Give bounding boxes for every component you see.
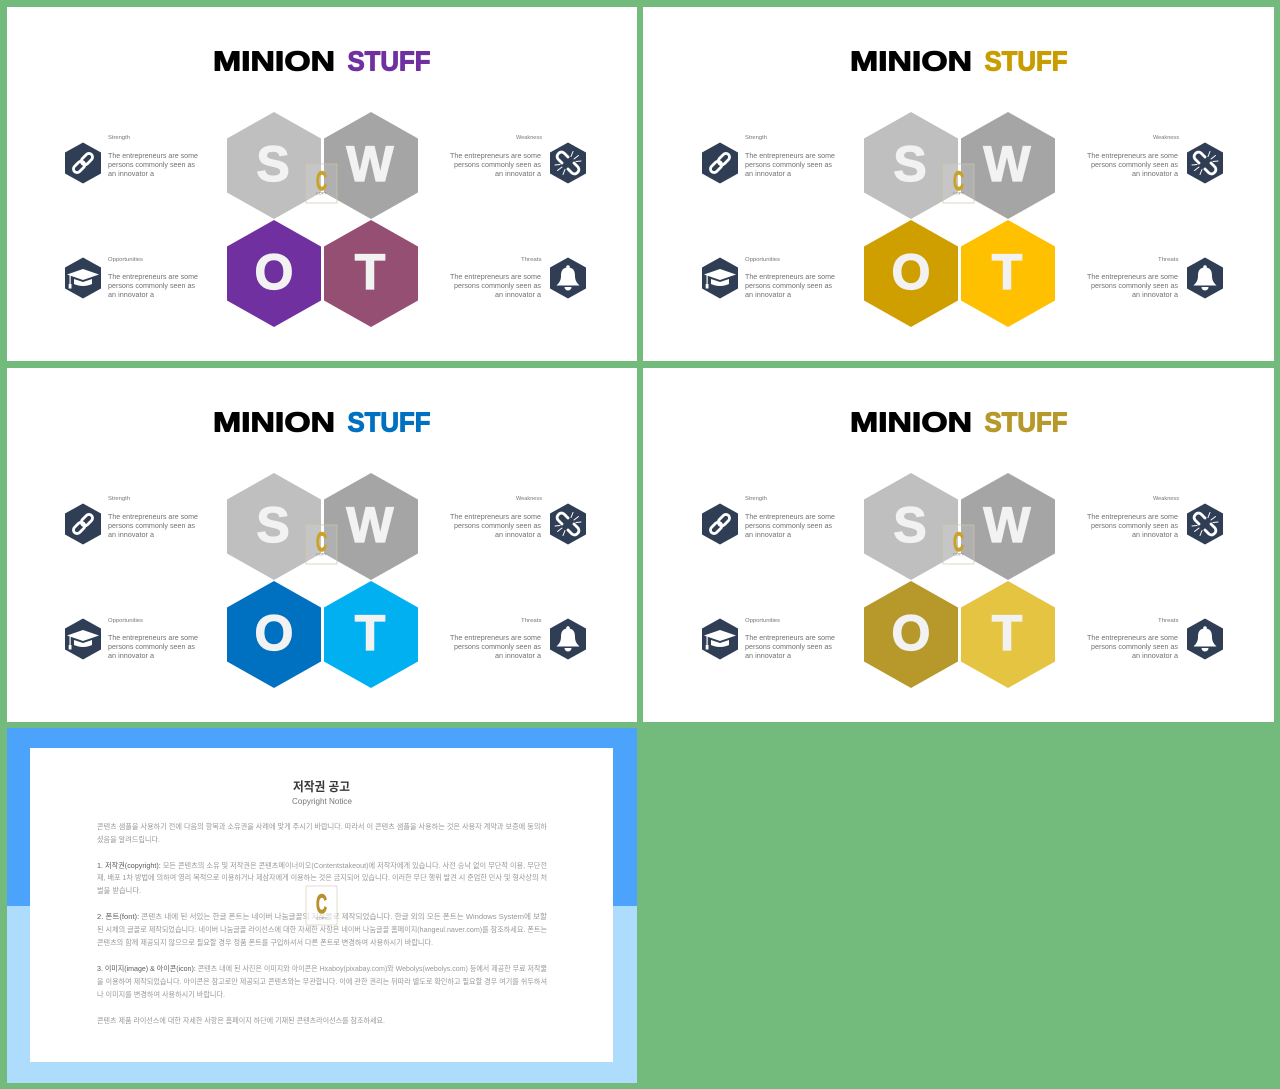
watermark: C (316, 889, 327, 919)
panel: copyright notice (7, 728, 637, 1083)
watermark: COPY (316, 916, 327, 920)
hexagon S: S (893, 497, 927, 553)
panel: gold SWOT slide (643, 7, 1274, 361)
hexagon S: S (893, 136, 927, 192)
text: weakness (1087, 496, 1179, 539)
icon: link (702, 504, 738, 544)
icon: graduation cap (65, 258, 101, 298)
text: weakness: Weakness (1153, 496, 1179, 502)
hexagon S (864, 473, 958, 580)
text: threats: an innovator a (495, 290, 542, 299)
hexagon W: W (346, 136, 394, 192)
hexagon O: O (255, 605, 293, 661)
text: opportunities (108, 257, 198, 299)
hexagon T: T (992, 244, 1022, 300)
watermark: COPY (316, 190, 327, 196)
hexagon T (324, 581, 418, 688)
icon: graduation cap (65, 618, 101, 660)
text: weakness: The entrepreneurs are some (1087, 512, 1178, 521)
text: opportunities: Opportunities (108, 257, 143, 263)
text: threats: persons commonly seen as (454, 281, 541, 290)
hexagon O (227, 581, 321, 688)
text: threats: The entrepreneurs are some (1087, 272, 1178, 281)
text: strength: persons commonly seen as (745, 160, 832, 169)
text: section 3 image and icon: 3. 이미지(image) & 아이콘(icon): 콘텐츠 내에 된 사진은 이미지와 아이콘은 Hxaboy(pixabay.com)와 Webolys(webolys.com) 등에서 제공한 무료 저작물 (97, 964, 547, 973)
text: weakness: an innovator a (495, 530, 542, 539)
text: closing: 콘텐츠 제품 라이선스에 대한 자세한 사항은 홈페이지 하단에 기재된 콘텐츠라이선스를 참조하세요. (97, 1016, 385, 1025)
text: strength: persons commonly seen as (108, 160, 195, 169)
hexagon W (961, 112, 1055, 219)
text: weakness: persons commonly seen as (454, 160, 541, 169)
title: MINION (213, 46, 335, 76)
icon: graduation cap (702, 618, 738, 660)
text: opportunities: Opportunities (745, 257, 780, 263)
text: threats: an innovator a (495, 651, 542, 660)
text: threats: The entrepreneurs are some (450, 633, 541, 642)
text: threats: Threats (521, 257, 542, 263)
hexagon O: O (255, 244, 293, 300)
text: strength: persons commonly seen as (108, 521, 195, 530)
text: weakness: an innovator a (1132, 530, 1179, 539)
hexagon S: S (256, 136, 290, 192)
text: weakness: persons commonly seen as (454, 521, 541, 530)
title (213, 406, 430, 438)
text: section 2 font: 2. 폰트(font): 콘텐츠 내에 된 서있는 한글 폰트는 네이버 나눔글꼴의 저작물로 제작되었습니다. 한글 외의 모든 폰트는 Windows System에 보할 (97, 912, 547, 921)
text: weakness: Weakness (516, 496, 542, 502)
text: intro (97, 822, 547, 844)
hexagon S (227, 473, 321, 580)
text: opportunities: The entrepreneurs are some (745, 272, 835, 281)
hexagon W (324, 473, 418, 580)
text: strength: persons commonly seen as (745, 521, 832, 530)
watermark (943, 164, 974, 203)
icon: broken link (550, 504, 586, 544)
hexagon O (227, 220, 321, 327)
text: weakness: an innovator a (495, 169, 542, 178)
watermark: C (953, 527, 964, 557)
icon: bell (550, 258, 586, 298)
icon: graduation cap (702, 258, 738, 298)
hexagon W (961, 473, 1055, 580)
text: opportunities: an innovator a (108, 651, 155, 660)
text: section 3 image and icon: 나 이미지를 변경하여 사용하시기 바랍니다. (97, 990, 225, 999)
text: strength: Strength (108, 135, 130, 141)
hexagon T: T (355, 244, 385, 300)
text: opportunities: The entrepreneurs are some (108, 633, 198, 642)
icon: broken link (1187, 504, 1223, 544)
text: threats (450, 257, 542, 299)
text: opportunities (108, 618, 198, 660)
text: weakness: The entrepreneurs are some (1087, 151, 1178, 160)
text: opportunities: an innovator a (745, 651, 792, 660)
title: STUFF (348, 46, 430, 76)
icon: link (702, 142, 738, 184)
title: MINION (850, 406, 972, 438)
text: section 2 font: 된 시체의 글꼴로 제작되었습니다. 네이버 나눔글꼴 라이선스에 대한 자세한 사항은 네이버 나눔글꼴 홈페이지(hangeul.naver.com)를 참조하세요. 폰트는 (97, 925, 547, 934)
title: MINION (213, 406, 335, 438)
text: strength: an innovator a (745, 530, 792, 539)
icon: bell (1187, 618, 1223, 660)
text: opportunities: The entrepreneurs are some (108, 272, 198, 281)
text: weakness: Weakness (516, 135, 542, 141)
text: intro: 셨음을 알려드립니다. (97, 835, 160, 844)
text: strength (108, 496, 198, 539)
icon: broken link (550, 142, 586, 184)
text: threats: persons commonly seen as (1091, 281, 1178, 290)
text: weakness (450, 135, 542, 178)
hexagon O (864, 220, 958, 327)
text: opportunities: an innovator a (108, 290, 155, 299)
text: section 1 copyright: 재, 배포 1차 방법에 의하여 영리 목적으로 이용하거나 제삼자에게 이용하는 것은 금지되어 있습니다. 이러한 무단 행위 발견 시 준엄한 민사 및 형사상의 처 (97, 873, 547, 882)
text: section 3 image and icon (97, 964, 547, 999)
hexagon O: O (892, 605, 930, 661)
text: intro: 콘텐츠 샘플을 사용하기 전에 다음의 항목과 소유권을 사례에 맞게 주시기 바랍니다. 따라서 이 콘텐츠 샘플을 사용하는 것은 사용자 계약과 보증에 동의하 (97, 822, 547, 831)
text: weakness (1087, 135, 1179, 178)
text: threats (1087, 257, 1179, 299)
text: weakness: an innovator a (1132, 169, 1179, 178)
text: section 1 copyright (97, 861, 547, 895)
text: threats: Threats (1158, 257, 1179, 263)
text: opportunities: Opportunities (108, 618, 143, 624)
title (850, 46, 1068, 76)
text: strength: The entrepreneurs are some (108, 512, 198, 521)
heading: copyright notice: 저작권 공고 (293, 779, 350, 794)
text: opportunities: The entrepreneurs are some (745, 633, 835, 642)
hexagon W: W (346, 497, 394, 553)
text: weakness: persons commonly seen as (1091, 521, 1178, 530)
text: weakness: Weakness (1153, 135, 1179, 141)
text: strength: Strength (745, 496, 767, 502)
hexagon W: W (983, 136, 1031, 192)
text: opportunities: an innovator a (745, 290, 792, 299)
hexagon T (961, 581, 1055, 688)
title (850, 406, 1068, 438)
title: STUFF (348, 406, 430, 438)
text: opportunities (745, 618, 835, 660)
text: strength (745, 496, 835, 539)
panel: blue SWOT slide (7, 368, 637, 722)
heading: copyright notice (292, 779, 352, 806)
text: weakness (450, 496, 542, 539)
hexagon T: T (355, 605, 385, 661)
text: threats: persons commonly seen as (1091, 642, 1178, 651)
title: STUFF (984, 406, 1068, 438)
text: opportunities: persons commonly seen as (745, 281, 832, 290)
watermark: C (316, 527, 327, 557)
watermark (943, 525, 974, 564)
title: MINION (850, 46, 972, 76)
watermark: C (316, 166, 327, 196)
text: threats: The entrepreneurs are some (1087, 633, 1178, 642)
hexagon W (324, 112, 418, 219)
text: threats (1087, 618, 1179, 660)
watermark (306, 164, 337, 203)
text: strength: an innovator a (108, 530, 155, 539)
watermark (306, 886, 337, 925)
text: threats (450, 618, 542, 660)
hexagon T (324, 220, 418, 327)
hexagon S (227, 112, 321, 219)
heading: copyright notice: Copyright Notice (292, 796, 352, 806)
title: STUFF (984, 46, 1068, 76)
text: section 2 font: 콘텐츠의 함께 제공되지 않으므로 필요할 경우 정품 폰트를 구입하셔서 다른 폰트로 변경하여 사용하시기 바랍니다. (97, 938, 433, 947)
icon: broken link (1187, 142, 1223, 184)
text: strength: Strength (108, 496, 130, 502)
text: threats: persons commonly seen as (454, 642, 541, 651)
watermark (306, 525, 337, 564)
icon: bell (550, 618, 586, 660)
text: opportunities: persons commonly seen as (108, 642, 195, 651)
text: strength (745, 135, 835, 178)
panel: olive gold SWOT slide (643, 368, 1274, 722)
icon: bell (1187, 258, 1223, 298)
hexagon T (961, 220, 1055, 327)
text: opportunities: persons commonly seen as (108, 281, 195, 290)
text: strength: The entrepreneurs are some (745, 512, 835, 521)
watermark: C (953, 166, 964, 196)
watermark: COPY (953, 552, 964, 556)
hexagon O (864, 581, 958, 688)
text: threats: an innovator a (1132, 290, 1179, 299)
text: strength: The entrepreneurs are some (745, 151, 835, 160)
text: weakness: persons commonly seen as (1091, 160, 1178, 169)
text: strength: an innovator a (745, 169, 792, 178)
text: strength (108, 135, 198, 178)
text: strength: The entrepreneurs are some (108, 151, 198, 160)
panel: purple SWOT slide (7, 7, 637, 361)
text: opportunities: persons commonly seen as (745, 642, 832, 651)
text: strength: Strength (745, 135, 767, 141)
text: weakness: The entrepreneurs are some (450, 151, 541, 160)
text: section 1 copyright: 1. 저작권(copyright): 모든 콘텐츠의 소유 및 저작권은 콘텐츠메이너이오(Contentstakeout)에 저작자에게 있습니다. 사전 승낙 없이 무단적 이용, 무단전 (97, 861, 547, 870)
watermark: COPY (953, 190, 964, 196)
text: threats: an innovator a (1132, 651, 1179, 660)
icon: link (65, 142, 101, 184)
text: weakness: The entrepreneurs are some (450, 512, 541, 521)
hexagon S: S (256, 497, 290, 553)
hexagon W: W (983, 497, 1031, 553)
text: opportunities (745, 257, 835, 299)
hexagon O: O (892, 244, 930, 300)
text: threats: Threats (521, 618, 542, 624)
text: opportunities: Opportunities (745, 618, 780, 624)
text: threats: The entrepreneurs are some (450, 272, 541, 281)
hexagon S (864, 112, 958, 219)
watermark: COPY (316, 552, 327, 556)
icon: link (65, 504, 101, 544)
text: threats: Threats (1158, 618, 1179, 624)
text: section 1 copyright: 벌을 받습니다. (97, 886, 141, 895)
text: strength: an innovator a (108, 169, 155, 178)
text: section 2 font (97, 912, 547, 947)
hexagon T: T (992, 605, 1022, 661)
title (213, 46, 430, 76)
text: section 3 image and icon: 을 이용하여 제작되었습니다. 아이콘은 참고로만 제공되고 콘텐츠와는 무관합니다. 이에 관한 권리는 뒤따라 별도로 확인하고 필요할 경우 여기를 쉬두하셔 (97, 977, 547, 986)
